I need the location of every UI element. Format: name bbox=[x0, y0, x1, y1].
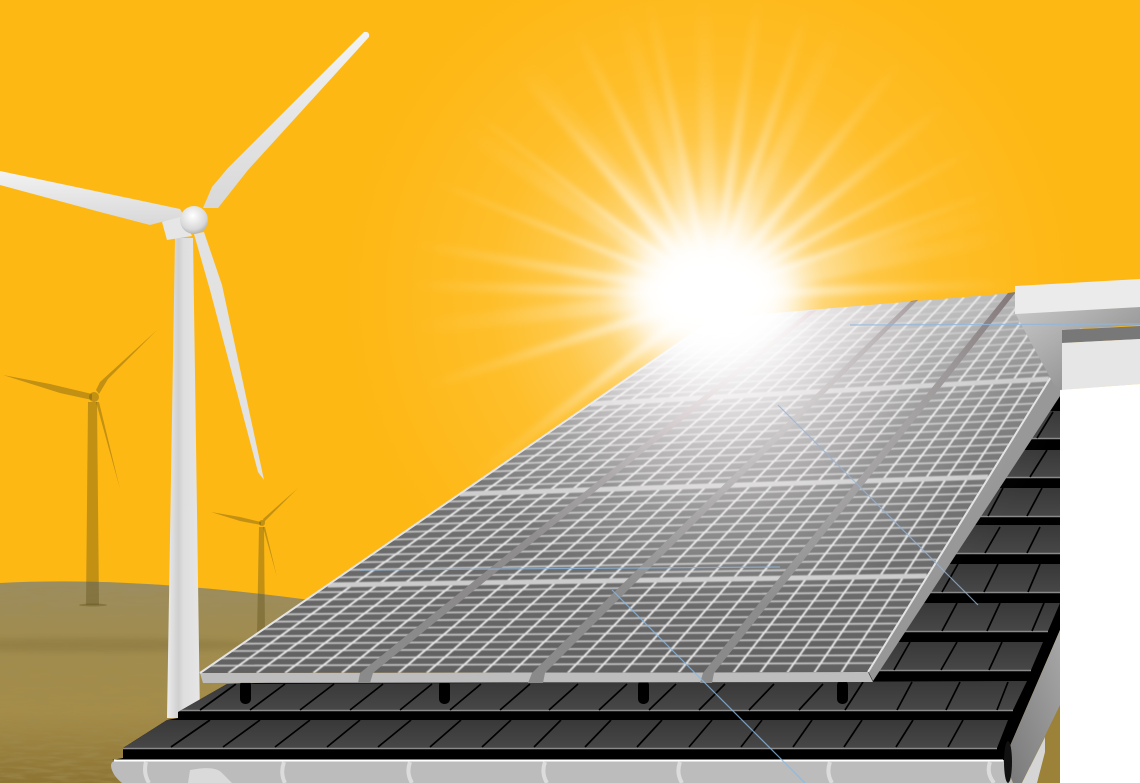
horizontal cell lines bbox=[211, 293, 1103, 666]
eave dark band bbox=[1062, 326, 1140, 343]
distant wind turbine left bbox=[3, 330, 157, 606]
panel row bars bbox=[328, 379, 1049, 585]
panel sun wash bbox=[200, 285, 1108, 673]
gable end below roof bbox=[1004, 630, 1060, 783]
thin blue reflection lines bbox=[360, 324, 1140, 783]
sun rays bbox=[198, 0, 1140, 551]
shingle seams bbox=[171, 412, 1053, 747]
diagonal cell lines bbox=[228, 286, 1092, 673]
white wall bbox=[1060, 384, 1140, 783]
panel support posts bbox=[240, 680, 848, 704]
eave soffit triangle bbox=[1015, 307, 1140, 393]
distant wind turbine right bbox=[211, 488, 298, 634]
panel front edge bbox=[200, 672, 873, 683]
shingle courses bbox=[123, 411, 1060, 748]
panel outer highlight bbox=[200, 285, 1108, 673]
blade up right bbox=[203, 32, 369, 208]
roof fascia gutter bbox=[111, 760, 1013, 783]
roof shingles bbox=[112, 385, 1060, 760]
panel side face bbox=[868, 360, 1062, 681]
eave fascia board bbox=[1015, 279, 1140, 314]
sun glow bbox=[300, 0, 1140, 700]
wall upper band bbox=[1062, 339, 1140, 390]
blade left bbox=[0, 171, 184, 225]
house wall and eave bbox=[1015, 279, 1140, 783]
turbine nacelle bbox=[162, 214, 192, 240]
panel surface cells bbox=[200, 285, 1108, 673]
solar panel array bbox=[200, 285, 1108, 683]
foreground wind turbine bbox=[0, 32, 369, 718]
shingle light edges bbox=[123, 438, 1060, 748]
grass field bbox=[0, 575, 1060, 783]
turbine tower bbox=[167, 238, 200, 718]
fascia bands bbox=[145, 762, 994, 783]
turbine hub bbox=[180, 206, 208, 234]
blade down bbox=[194, 232, 264, 480]
column gutters bbox=[358, 310, 817, 683]
